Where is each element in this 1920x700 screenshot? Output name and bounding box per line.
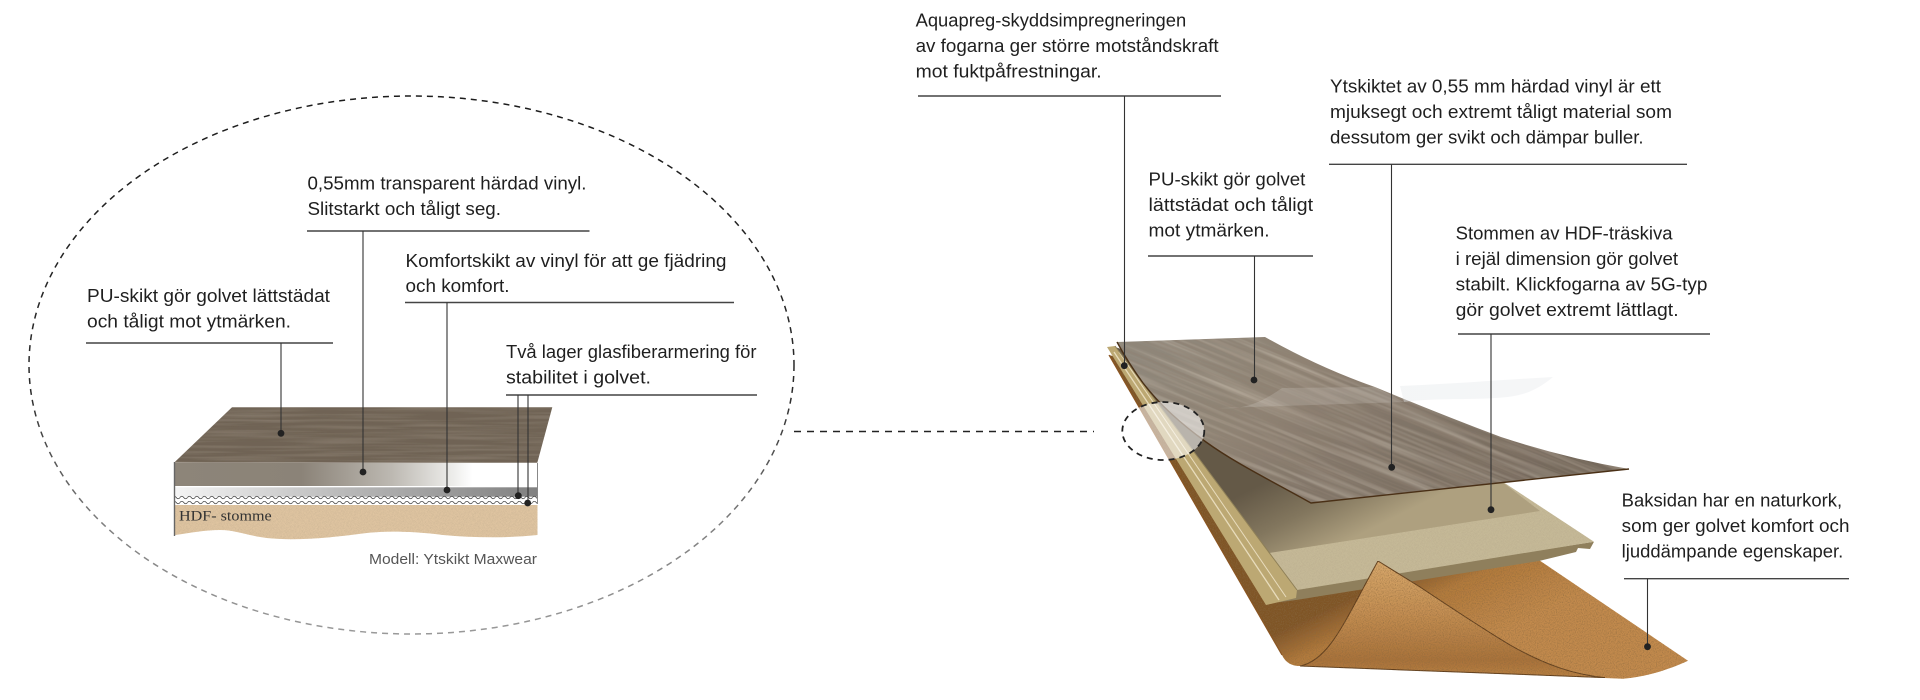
callout: 0,55mm vinyl: Slitstarkt och tåligt seg. — [308, 199, 501, 219]
board shadow under vinyl — [1115, 347, 1540, 553]
callout: cork backing: Baksidan har en naturkork, — [1622, 490, 1842, 510]
callout: PU layer left: PU-skikt gör golvet lättstädat — [87, 286, 330, 306]
callout: PU layer right: PU-skikt gör golvet — [1148, 170, 1305, 190]
callout: Aquapreg: av fogarna ger större motståndskraft — [916, 36, 1219, 56]
dashed connector line — [794, 430, 1094, 432]
callout: 0,55mm vinyl: 0,55mm transparent härdad vinyl. — [308, 174, 586, 194]
callout: HDF core: Stommen av HDF-träskiva — [1456, 224, 1674, 244]
callout: Aquapreg — [916, 10, 1221, 369]
comfort vinyl band — [175, 487, 538, 497]
callout: top layer vinyl — [1329, 76, 1687, 471]
cork flap — [1300, 561, 1605, 678]
small dashed magnifier ellipse — [1122, 402, 1204, 460]
cross-section diagram: floor layers — [170, 400, 560, 539]
vinyl sheet — [1116, 337, 1630, 504]
callout: PU layer left — [86, 286, 333, 437]
callout: PU layer right: mot ytmärken. — [1148, 220, 1270, 240]
callout: PU layer left: och tåligt mot ytmärken. — [87, 312, 291, 332]
callout: PU layer right — [1148, 170, 1313, 383]
dashed ellipse: detail magnifier — [29, 96, 794, 634]
caption: model: Modell: Ytskikt Maxwear — [369, 551, 537, 568]
callout: top layer vinyl: mjuksegt och extremt tåligt material som — [1330, 102, 1672, 122]
callout: comfort layer: Komfortskikt av vinyl för att ge fjädring — [406, 251, 726, 271]
callout: glass fibre: Två lager glasfiberarmering för — [506, 342, 756, 362]
side outlines — [174, 462, 538, 536]
callout: HDF core: stabilt. Klickfogarna av 5G-typ — [1456, 274, 1707, 294]
top wood surface — [174, 407, 552, 463]
callout: HDF core: gör golvet extremt lättlagt. — [1456, 300, 1679, 320]
callout: PU layer right: lättstädat och tåligt — [1148, 195, 1313, 215]
HDF core — [175, 505, 538, 539]
label: HDF: HDF- stomme — [179, 508, 272, 524]
callout: HDF core: i rejäl dimension gör golvet — [1456, 249, 1678, 269]
callout: top layer vinyl: dessutom ger svikt och dämpar buller. — [1330, 128, 1644, 148]
callout: comfort layer: och komfort. — [406, 276, 510, 296]
callout: cork backing: ljuddämpande egenskaper. — [1622, 542, 1843, 562]
callout: cork backing: som ger golvet komfort och — [1622, 516, 1850, 536]
callout: HDF core — [1456, 224, 1710, 513]
callout: 0,55mm vinyl — [307, 174, 590, 475]
callout: Aquapreg: mot fuktpåfrestningar. — [916, 62, 1102, 82]
callout: glass fibre: stabilitet i golvet. — [506, 368, 651, 388]
exploded floor plank illustration — [1107, 337, 1688, 679]
callout: glass fibre — [506, 342, 757, 506]
transparent lifted wear layer haze — [1400, 377, 1553, 402]
HDF board top — [1115, 347, 1594, 590]
callout: Aquapreg: Aquapreg-skyddsimpregneringen — [916, 10, 1186, 30]
tongue strip — [1107, 346, 1297, 605]
transparent vinyl band — [174, 463, 538, 486]
callout: cork backing — [1622, 490, 1850, 650]
callout: comfort layer — [405, 251, 734, 493]
cork layer — [1109, 355, 1688, 679]
callout: top layer vinyl: Ytskiktet av 0,55 mm härdad vinyl är ett — [1330, 76, 1661, 96]
glass fibre layers — [175, 496, 538, 506]
HDF board front face — [1265, 542, 1594, 604]
